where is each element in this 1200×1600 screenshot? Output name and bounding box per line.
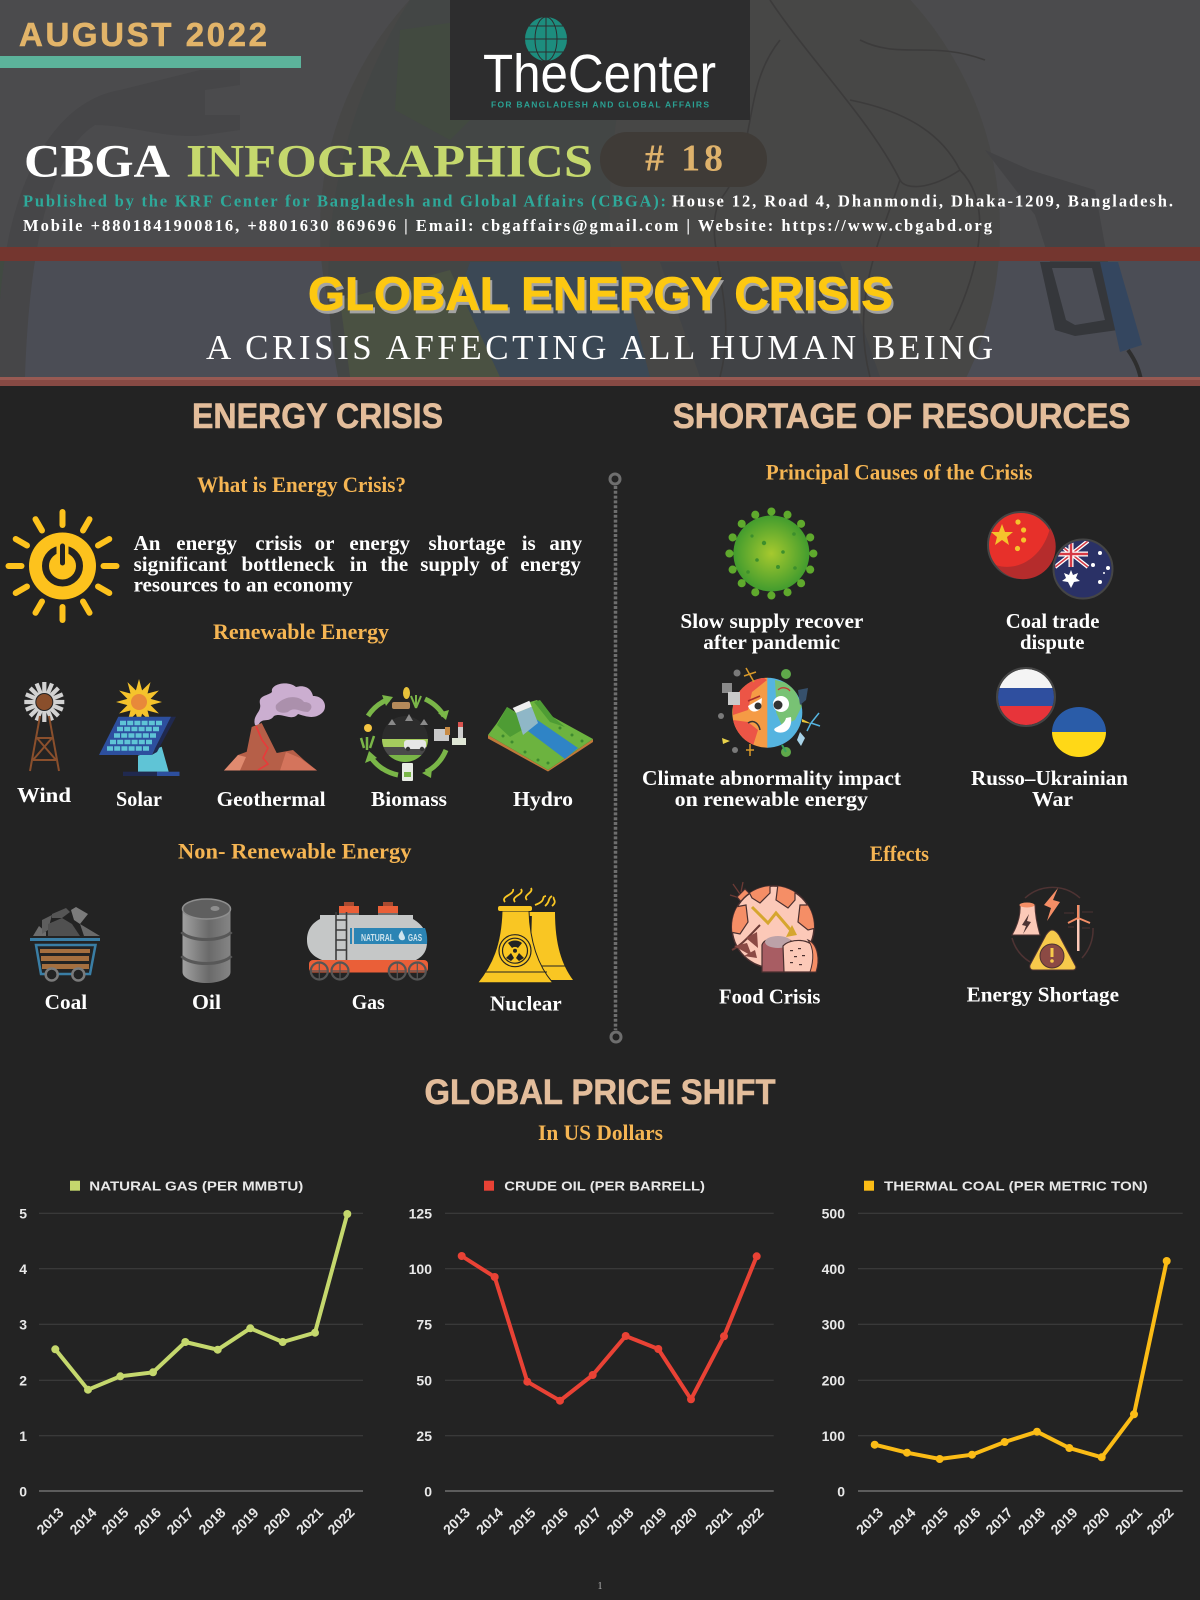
text block: energy crisis definition: any xyxy=(549,531,583,555)
y axis labels: 0 xyxy=(424,1484,432,1500)
x axis labels: 2018 xyxy=(1015,1504,1048,1538)
chart: natural gas xyxy=(19,1179,363,1538)
label: nuclear: Nuclear xyxy=(490,992,562,1016)
label: climate abnormality: Climate abnormality impact xyxy=(642,766,901,790)
tanker label text xyxy=(361,930,422,944)
publisher details: Published by the KRF Center for Bangladesh and Global Affairs (CBGA): xyxy=(23,192,666,210)
label: coal trade dispute: Coal trade xyxy=(1006,609,1099,633)
icon: power sun xyxy=(8,512,116,620)
grid lines xyxy=(39,1213,363,1491)
subheading: renewable energy: Renewable Energy xyxy=(213,619,389,644)
text block: energy crisis definition: resources to an economy xyxy=(134,572,353,596)
x axis labels: 2014 xyxy=(885,1504,919,1538)
x axis labels: 2021 xyxy=(702,1504,735,1538)
text block: energy crisis definition: energy xyxy=(349,531,411,555)
y axis labels xyxy=(409,1206,432,1500)
icon: oil barrel xyxy=(182,899,232,983)
panel: energy crisis xyxy=(8,397,593,1016)
y axis labels: 1 xyxy=(19,1428,27,1444)
tanker label text: GAS xyxy=(408,933,422,944)
icon: geothermal xyxy=(224,683,325,770)
label: slow supply recovery: Slow supply recover xyxy=(680,609,863,633)
panel: shortage of resources xyxy=(642,397,1133,1009)
chart: thermal coal xyxy=(822,1179,1183,1538)
main heading: GLOBAL ENERGY CRISIS xyxy=(308,267,893,320)
label: oil: Oil xyxy=(192,990,221,1014)
x axis labels: 2018 xyxy=(195,1504,229,1538)
y axis labels: 500 xyxy=(822,1206,845,1222)
icon: food crisis xyxy=(730,882,818,972)
legend: thermal coal: THERMAL COAL (PER METRIC TON) xyxy=(884,1179,1148,1194)
icon: virus xyxy=(727,509,816,598)
publisher details: House 12, Road 4, Dhanmondi, Dhaka-1209, Bangladesh. xyxy=(672,192,1173,210)
subheading: A CRISIS AFFECTING ALL HUMAN BEING xyxy=(206,328,993,367)
y axis labels: 400 xyxy=(822,1261,845,1277)
label: food crisis: Food Crisis xyxy=(719,985,820,1009)
y axis labels: 3 xyxy=(19,1316,27,1332)
text block: energy crisis definition: supply xyxy=(420,552,480,576)
y axis labels: 75 xyxy=(416,1316,432,1332)
legend: natural gas: NATURAL GAS (PER MMBTU) xyxy=(89,1179,303,1194)
icon: china and australia flags xyxy=(988,512,1112,598)
subheading: non-renewable energy: Non- Renewable Energy xyxy=(178,838,412,864)
y axis labels: 0 xyxy=(837,1484,845,1500)
icon: coal xyxy=(30,907,100,980)
title: CBGA Infographics: CBGA xyxy=(24,136,170,188)
page number: 1 xyxy=(598,1581,602,1592)
text block: energy crisis definition: bottleneck xyxy=(242,552,335,576)
logo tagline: FOR BANGLADESH AND GLOBAL AFFAIRS xyxy=(491,100,709,110)
red band upper xyxy=(0,247,1200,261)
label: energy shortage: Energy Shortage xyxy=(967,983,1119,1007)
x axis labels: 2019 xyxy=(1047,1504,1081,1538)
x axis labels: 2018 xyxy=(603,1504,637,1538)
x axis labels: 2013 xyxy=(33,1504,67,1538)
date underline bar xyxy=(0,56,301,68)
legend: crude oil: CRUDE OIL (PER BARRELL) xyxy=(504,1179,705,1194)
x axis labels: 2021 xyxy=(293,1504,326,1538)
y axis labels: 50 xyxy=(416,1372,432,1388)
icon: gas tanker xyxy=(307,902,428,980)
label: coal trade dispute: dispute xyxy=(1020,630,1084,654)
icon: climate earth xyxy=(718,668,820,757)
x axis labels: 2022 xyxy=(1143,1504,1177,1538)
icon: energy shortage xyxy=(1012,887,1093,970)
x axis labels: 2016 xyxy=(950,1504,984,1538)
label: climate abnormality: on renewable energy xyxy=(675,787,869,811)
data line xyxy=(51,1210,351,1394)
x axis labels: 2016 xyxy=(538,1504,571,1538)
grid lines xyxy=(445,1213,774,1491)
title: CBGA Infographics xyxy=(24,136,593,188)
icon: russia and ukraine flags xyxy=(996,668,1108,758)
icon: hydro xyxy=(488,700,593,772)
x axis labels: 2015 xyxy=(505,1504,539,1538)
header background: earth, plug and fuel nozzle photo xyxy=(0,0,1200,377)
publisher details: Mobile +8801841900816, +8801630 869696 | Email: cbgaffairs@gmail.com | Website: https://www.cbgabd.org xyxy=(23,216,993,235)
x axis labels: 2014 xyxy=(66,1504,100,1538)
x axis labels: 2021 xyxy=(1112,1504,1145,1538)
label: biomass: Biomass xyxy=(371,787,447,811)
icon: solar xyxy=(99,679,180,776)
icon: globe xyxy=(525,17,567,61)
text block: energy crisis definition: in xyxy=(350,552,368,576)
grid lines xyxy=(858,1213,1183,1491)
label: gas: Gas xyxy=(352,990,385,1014)
x axis labels xyxy=(440,1504,767,1538)
x axis labels: 2013 xyxy=(440,1504,473,1538)
icon: biomass xyxy=(361,687,466,781)
y axis labels: 100 xyxy=(822,1428,845,1444)
logo: The Center xyxy=(450,0,750,120)
heading: global price shift: GLOBAL PRICE SHIFT xyxy=(424,1073,776,1112)
x axis labels: 2020 xyxy=(667,1504,700,1538)
text block: energy crisis definition: or xyxy=(315,531,334,555)
x axis labels: 2019 xyxy=(228,1504,262,1538)
label: coal: Coal xyxy=(45,990,87,1014)
text block: energy crisis definition: energy xyxy=(520,552,581,576)
subheading: what is energy crisis: What is Energy Crisis? xyxy=(197,472,406,497)
icon: wind xyxy=(24,682,64,771)
x axis labels: 2020 xyxy=(260,1504,294,1538)
y axis labels xyxy=(19,1206,27,1500)
label: hydro: Hydro xyxy=(513,787,573,811)
label: geothermal: Geothermal xyxy=(217,787,326,811)
heading: energy crisis: ENERGY CRISIS xyxy=(192,397,443,436)
label: slow supply recovery: after pandemic xyxy=(703,630,840,654)
y axis labels: 0 xyxy=(19,1484,27,1500)
x axis labels: 2014 xyxy=(473,1504,506,1538)
label: russo-ukrainian war: Russo–Ukrainian xyxy=(971,766,1128,790)
y axis labels: 5 xyxy=(19,1206,27,1222)
y axis labels: 2 xyxy=(19,1372,27,1388)
data line xyxy=(458,1252,761,1405)
x axis labels: 2016 xyxy=(131,1504,164,1538)
x axis labels: 2015 xyxy=(98,1504,132,1538)
issue badge xyxy=(600,132,767,187)
icon: nuclear plant xyxy=(478,888,573,983)
x axis labels: 2017 xyxy=(163,1504,197,1538)
issue badge: # 18 xyxy=(645,138,723,180)
x axis labels: 2017 xyxy=(982,1504,1016,1538)
x axis labels: 2022 xyxy=(733,1504,767,1538)
x axis labels: 2019 xyxy=(636,1504,670,1538)
y axis labels xyxy=(822,1206,845,1500)
text block: energy crisis definition: energy xyxy=(176,531,237,555)
label: wind: Wind xyxy=(17,783,71,807)
chart: crude oil xyxy=(409,1179,774,1538)
tanker label text: NATURAL xyxy=(361,933,394,944)
y axis labels: 25 xyxy=(416,1428,432,1444)
x axis labels: 2022 xyxy=(324,1504,358,1538)
x axis labels xyxy=(853,1504,1177,1538)
label: russo-ukrainian war: War xyxy=(1032,787,1073,811)
heading: shortage of resources: SHORTAGE OF RESOURCES xyxy=(673,397,1130,436)
x axis labels: 2020 xyxy=(1079,1504,1113,1538)
y axis labels: 4 xyxy=(19,1261,27,1277)
data line xyxy=(871,1257,1171,1463)
text block: energy crisis definition: of xyxy=(490,552,509,576)
publisher details xyxy=(23,192,1173,235)
text block: energy crisis definition: An xyxy=(134,531,161,555)
x axis labels: 2013 xyxy=(853,1504,886,1538)
date label: AUGUST 2022 xyxy=(19,16,267,53)
x axis labels: 2017 xyxy=(571,1504,604,1538)
text block: energy crisis definition: the xyxy=(380,552,408,576)
text block: energy crisis definition: significant xyxy=(134,552,227,576)
vertical divider xyxy=(610,474,621,1042)
y axis labels: 200 xyxy=(822,1372,845,1388)
y axis labels: 300 xyxy=(822,1316,845,1332)
text block: energy crisis definition: is xyxy=(522,531,536,555)
red band lower xyxy=(0,377,1200,386)
y axis labels: 125 xyxy=(409,1206,432,1222)
title: CBGA Infographics: INFOGRAPHICS xyxy=(186,136,593,188)
subheading: principal causes: Principal Causes of the Crisis xyxy=(766,460,1033,485)
x axis labels xyxy=(33,1504,358,1538)
label: solar: Solar xyxy=(116,787,162,811)
text block: energy crisis definition: shortage xyxy=(428,531,506,555)
subheading: effects: Effects xyxy=(870,841,929,866)
subheading: in us dollars: In US Dollars xyxy=(538,1120,663,1145)
text block: energy crisis definition: crisis xyxy=(255,531,302,555)
logo wordmark: TheCenter xyxy=(483,44,716,104)
x axis labels: 2015 xyxy=(918,1504,951,1538)
y axis labels: 100 xyxy=(409,1261,432,1277)
